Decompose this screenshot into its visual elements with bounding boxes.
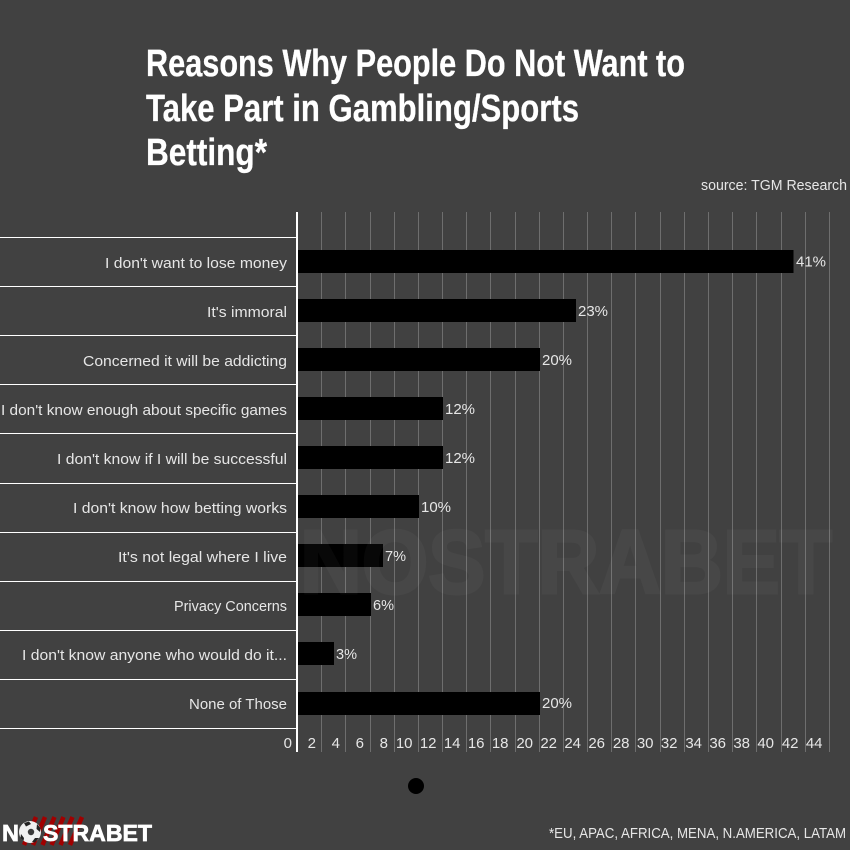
row separators xyxy=(0,238,297,728)
x axis labels: 18 xyxy=(492,735,508,752)
x axis labels: 8 xyxy=(380,735,388,752)
x axis labels: 24 xyxy=(564,735,581,752)
title: Reasons Why People Do Not Want to xyxy=(146,43,685,85)
title: Take Part in Gambling/Sports xyxy=(146,88,579,130)
x axis labels: 22 xyxy=(540,735,557,752)
x axis labels: 34 xyxy=(685,735,702,752)
category labels: It's immoral xyxy=(207,304,287,321)
category labels: Privacy Concerns xyxy=(174,598,287,615)
vertical axis xyxy=(296,212,298,752)
x axis labels: 10 xyxy=(396,735,412,752)
value labels: 20% xyxy=(542,352,572,369)
logo xyxy=(2,817,152,846)
category labels: I don't know if I will be successful xyxy=(57,451,287,468)
value labels: 41% xyxy=(796,254,826,270)
x axis labels: 26 xyxy=(588,735,605,752)
title: Betting* xyxy=(146,132,267,174)
logo wordmark: STRABET xyxy=(43,820,152,846)
value labels xyxy=(336,254,826,712)
x axis labels: 20 xyxy=(516,735,533,752)
x axis labels: 36 xyxy=(709,735,726,752)
x axis labels: 14 xyxy=(444,735,460,752)
category labels: I don't want to lose money xyxy=(105,255,288,272)
value labels: 6% xyxy=(373,597,394,614)
value labels: 23% xyxy=(578,303,608,320)
value labels: 7% xyxy=(385,548,406,565)
x axis labels: 32 xyxy=(661,735,678,752)
title xyxy=(146,43,685,174)
x axis labels: 4 xyxy=(332,735,340,752)
x axis labels: 6 xyxy=(356,735,364,752)
x axis labels: 0 xyxy=(284,735,292,752)
legend dot xyxy=(408,778,424,794)
bar chart xyxy=(0,212,826,752)
value labels: 3% xyxy=(336,646,357,663)
x axis labels: 30 xyxy=(637,735,654,752)
category labels: I don't know how betting works xyxy=(73,500,287,517)
watermark: NOSTRABET xyxy=(300,513,832,613)
x axis labels: 16 xyxy=(468,735,484,752)
x axis labels: 28 xyxy=(613,735,630,752)
logo wordmark: N xyxy=(2,820,19,846)
category labels: I don't know enough about specific games xyxy=(1,402,287,419)
x axis labels: 44 xyxy=(806,735,822,752)
category labels xyxy=(1,255,288,713)
x axis labels: 40 xyxy=(757,735,774,752)
x axis labels: 2 xyxy=(308,735,316,752)
category labels: None of Those xyxy=(189,696,287,713)
category labels: Concerned it will be addicting xyxy=(83,353,287,370)
logo stripes xyxy=(24,817,82,845)
value labels: 20% xyxy=(542,695,572,712)
x axis labels: 38 xyxy=(733,735,750,752)
icon: soccer ball xyxy=(19,821,41,843)
bars xyxy=(298,250,794,715)
category labels: I don't know anyone who would do it... xyxy=(22,647,287,664)
value labels: 12% xyxy=(445,450,475,467)
value labels: 10% xyxy=(421,499,451,516)
value labels: 12% xyxy=(445,401,475,418)
x axis labels: 42 xyxy=(782,735,798,752)
x axis labels xyxy=(284,735,822,752)
category labels: It's not legal where I live xyxy=(118,549,287,566)
x axis labels: 12 xyxy=(420,735,436,752)
